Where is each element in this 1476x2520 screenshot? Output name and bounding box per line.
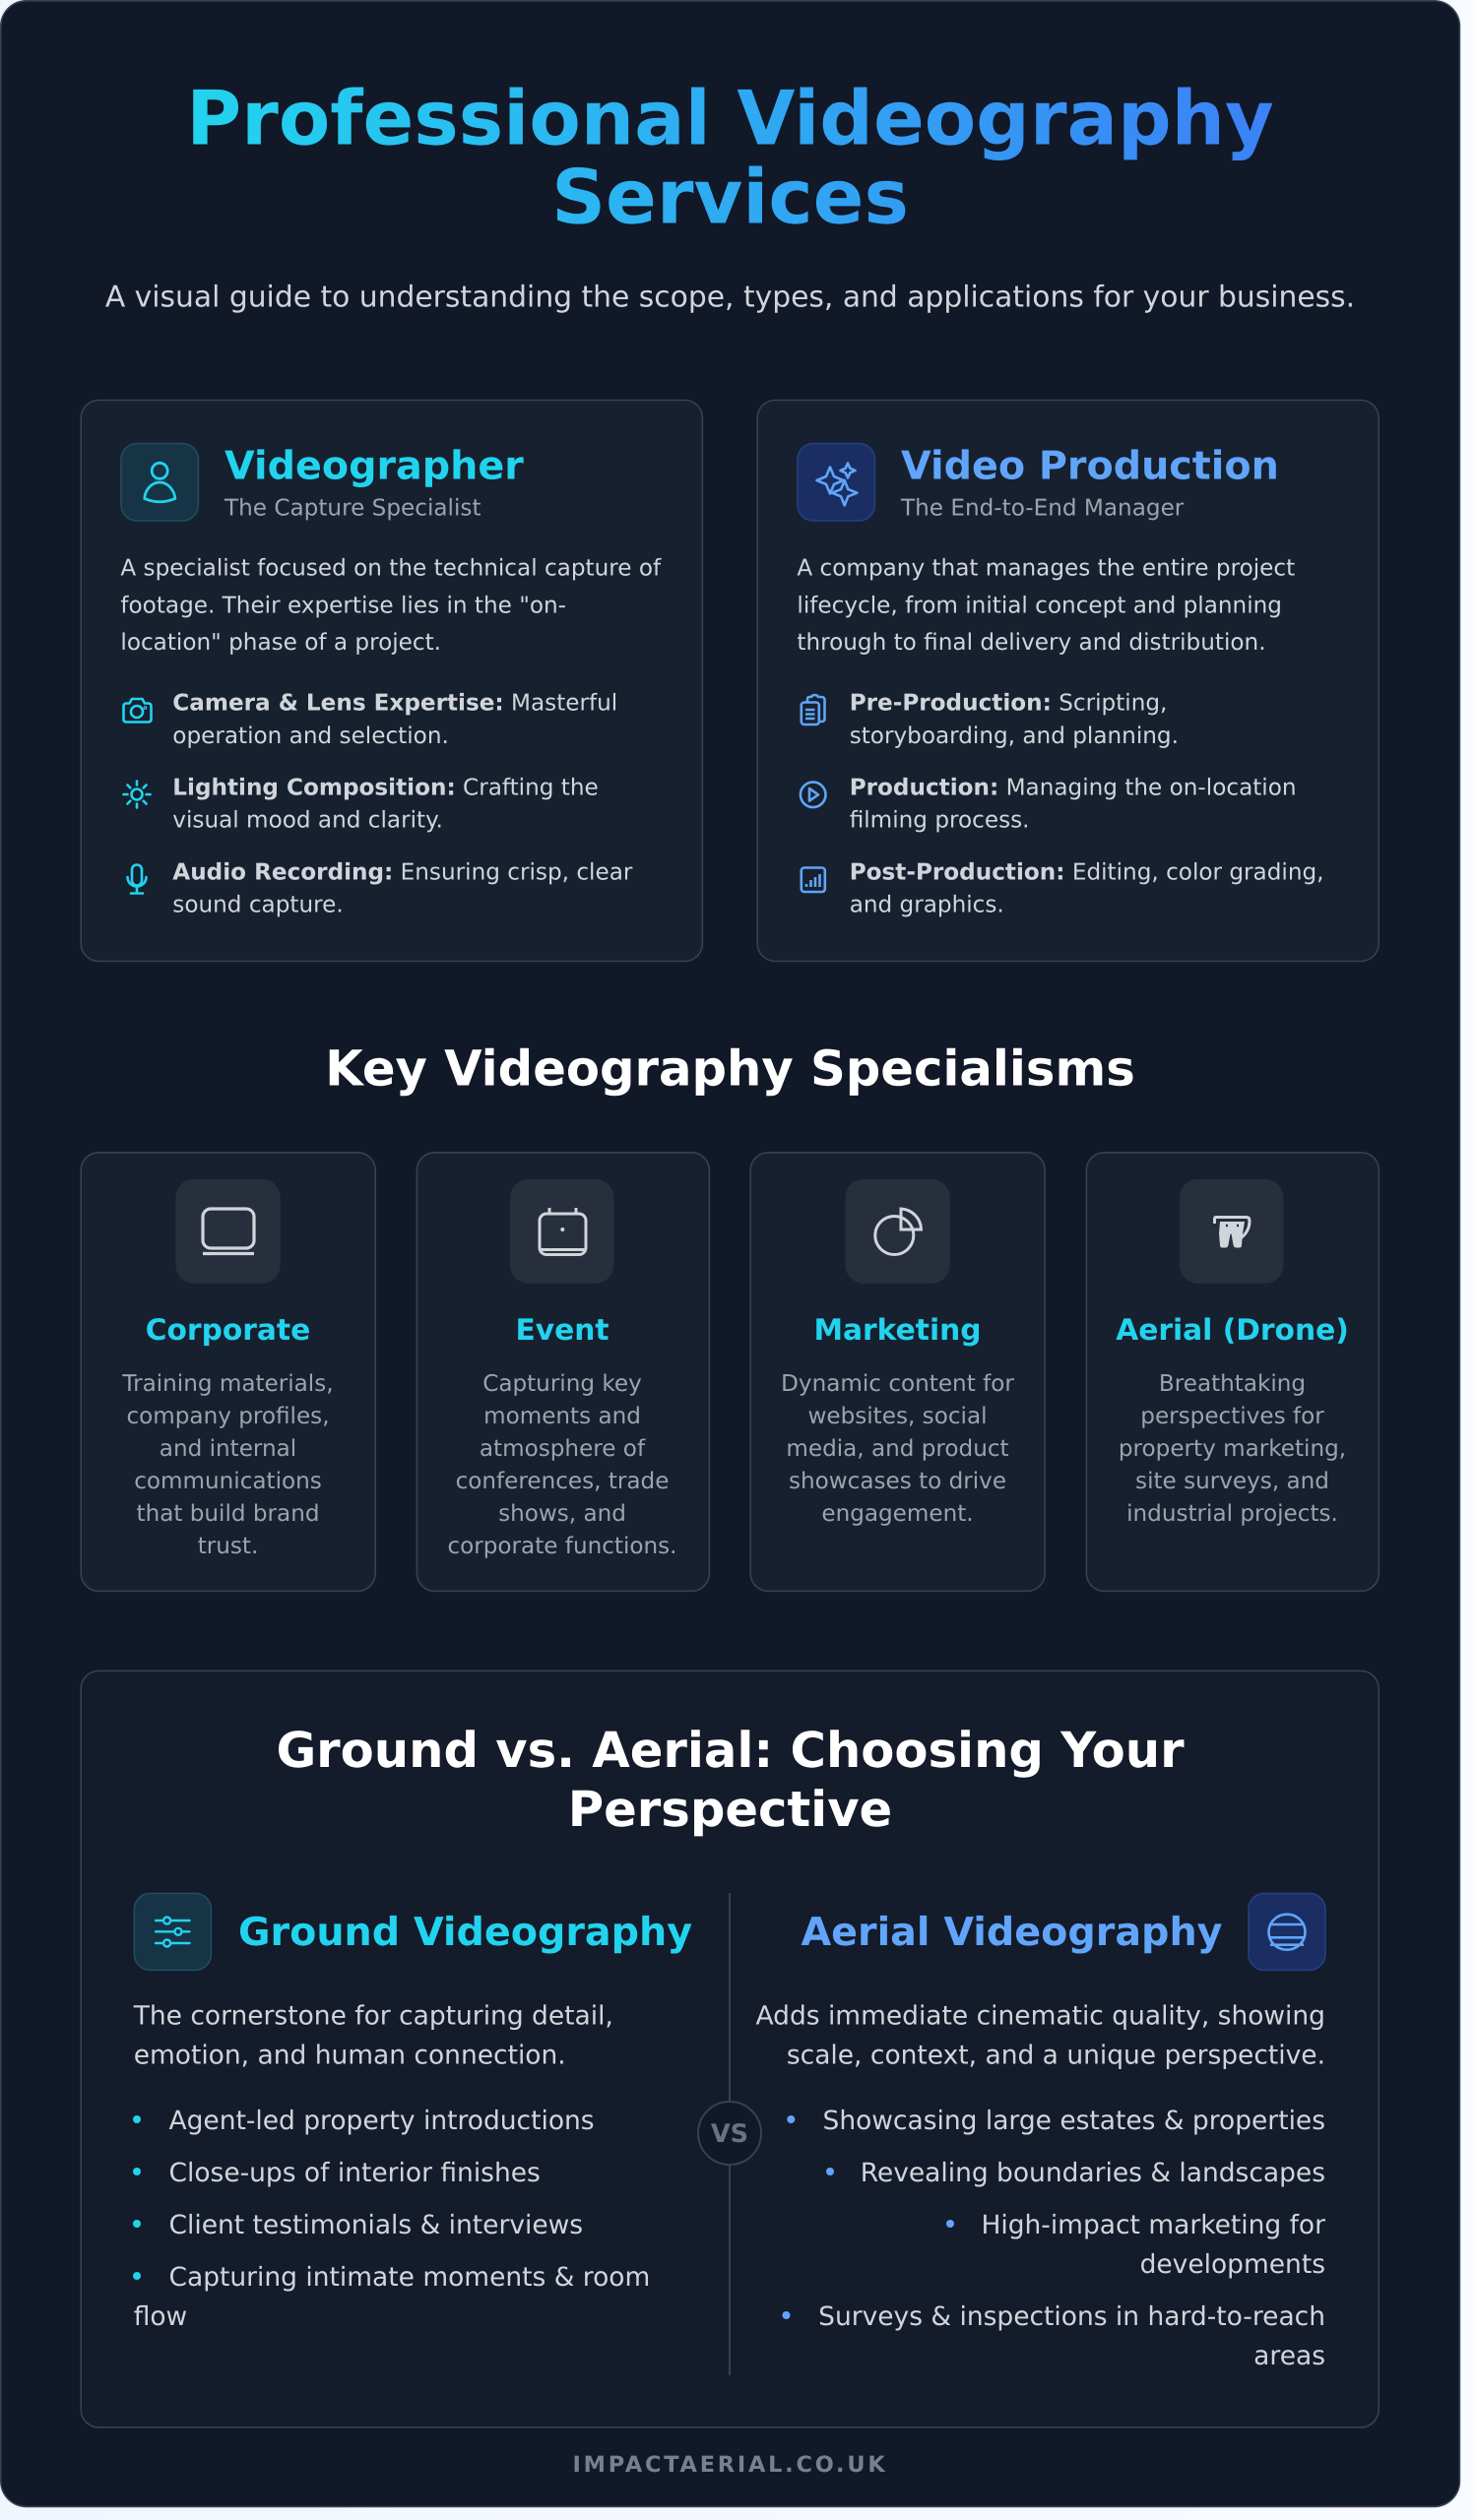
column: aerial videography — [756, 1893, 1325, 2371]
bullet list: ground uses — [133, 2106, 650, 2332]
divider with vs badge: VS — [711, 2119, 748, 2149]
description: emotion, and human connection. — [134, 2041, 566, 2071]
heading: video production: Video Production — [901, 444, 1279, 489]
list item: pre-production: Pre-Production: Scripting, — [850, 691, 1167, 717]
description: location" phase of a project. — [120, 630, 441, 656]
heading: comparison: Perspective — [568, 1781, 892, 1838]
description: Breathtaking — [1159, 1371, 1306, 1397]
description: websites, social — [807, 1404, 988, 1429]
description: shows, and — [498, 1501, 626, 1527]
list item: production: Production: Managing the on-location — [850, 776, 1297, 801]
description — [797, 555, 1295, 656]
heading: event: Event — [515, 1313, 610, 1348]
bullet list: ground uses: Close-ups of interior finishes — [169, 2158, 541, 2188]
description: Capturing key — [482, 1371, 642, 1397]
bullet list: aerial uses: areas — [1253, 2341, 1325, 2371]
heading: specialisms: Key Videography Specialisms — [325, 1040, 1135, 1097]
list item: lighting — [172, 776, 599, 834]
description — [121, 1371, 334, 1559]
column: ground videography — [133, 1893, 692, 2332]
description: A company that manages the entire project — [797, 555, 1295, 581]
icon: pie chart — [845, 1179, 950, 1284]
description: footage. Their expertise lies in the "on- — [120, 593, 566, 618]
subtitle: A visual guide to understanding the scope, types, and applications for your business. — [105, 280, 1355, 315]
list item: post-production: and graphics. — [850, 893, 1004, 918]
list item: post-production: Post-Production: Editing, color grading, — [850, 859, 1324, 885]
description: A specialist focused on the technical capture of — [120, 555, 662, 581]
description: site surveys, and — [1135, 1469, 1329, 1494]
icon: sun — [124, 782, 150, 807]
list item: audio: Audio Recording: Ensuring crisp, clear — [172, 859, 633, 885]
description: conferences, trade — [456, 1469, 669, 1494]
icon: sliders — [134, 1893, 211, 1970]
list item: camera and lens — [172, 691, 617, 749]
icon: chart — [802, 868, 825, 892]
heading: aerial videography: Aerial Videography — [801, 1910, 1223, 1955]
description — [781, 1371, 1014, 1527]
panel: aerial drone — [1086, 1153, 1379, 1591]
description: corporate functions. — [447, 1534, 677, 1559]
description: company profiles, — [126, 1404, 330, 1429]
description: property marketing, — [1119, 1436, 1346, 1462]
list item: production: filming process. — [850, 808, 1030, 834]
icon: sparkles — [798, 444, 874, 521]
icon: person — [121, 444, 198, 521]
description: showcases to drive — [789, 1469, 1006, 1494]
tagline: The Capture Specialist — [224, 495, 481, 521]
icon: globe — [1249, 1893, 1325, 1970]
heading: comparison — [276, 1722, 1185, 1838]
description: through to final delivery and distribution. — [797, 630, 1266, 656]
title: Professional Videography — [186, 76, 1274, 163]
description: moments and — [483, 1404, 641, 1429]
heading: aerial drone: Aerial (Drone) — [1116, 1313, 1349, 1348]
list item: camera and lens: Camera & Lens Expertise: Masterful — [172, 691, 617, 717]
heading: marketing: Marketing — [813, 1313, 982, 1348]
tagline: The End-to-End Manager — [900, 495, 1185, 521]
description: industrial projects. — [1126, 1501, 1338, 1527]
description: communications — [134, 1469, 322, 1494]
list item: lighting: Lighting Composition: Crafting the — [172, 776, 599, 801]
bullet list: aerial uses: High-impact marketing for — [981, 2210, 1325, 2240]
description: atmosphere of — [480, 1436, 646, 1462]
panel: corporate — [81, 1153, 375, 1591]
list item: audio — [172, 859, 633, 918]
description — [447, 1371, 677, 1559]
bullet list: aerial uses: Revealing boundaries & landscapes — [861, 2158, 1325, 2188]
panel: marketing — [750, 1153, 1045, 1591]
description: that build brand — [137, 1501, 319, 1527]
list item: audio: sound capture. — [172, 893, 344, 918]
description: The cornerstone for capturing detail, — [133, 2001, 613, 2032]
icon: play — [801, 782, 825, 807]
description: Training materials, — [121, 1371, 334, 1397]
footer: IMPACTAERIAL.CO.UK — [573, 2452, 887, 2478]
description: and internal — [160, 1436, 296, 1462]
icon: drone — [1180, 1179, 1283, 1284]
description — [1119, 1371, 1346, 1527]
description: media, and product — [786, 1436, 1009, 1462]
icon: microphone — [128, 864, 146, 894]
panel: ground vs aerial — [81, 1670, 1379, 2427]
bullet list: ground uses: flow — [134, 2301, 187, 2332]
title: Services — [551, 155, 909, 242]
bullet list: aerial uses: developments — [1140, 2249, 1325, 2280]
list item: post-production — [850, 859, 1324, 918]
bullet list: aerial uses — [782, 2106, 1325, 2371]
title — [186, 76, 1274, 242]
panel: videographer — [81, 400, 702, 961]
icon: camera — [124, 699, 152, 723]
list item: pre-production: storyboarding, and planning. — [850, 724, 1179, 749]
list item: pre-production — [850, 691, 1179, 749]
description — [133, 2001, 613, 2071]
heading: comparison: Ground vs. Aerial: Choosing Your — [276, 1722, 1185, 1779]
icon: laptop — [175, 1179, 281, 1284]
list item: lighting: visual mood and clarity. — [172, 808, 443, 834]
icon: calendar — [510, 1179, 613, 1284]
list item: camera and lens: operation and selection. — [172, 724, 449, 749]
bullet list: ground uses: Client testimonials & interviews — [169, 2210, 583, 2240]
panel: video production — [757, 400, 1379, 961]
description: Adds immediate cinematic quality, showing — [756, 2001, 1325, 2032]
bullet list: aerial uses: Showcasing large estates & properties — [823, 2106, 1325, 2136]
bullet list: aerial uses: Surveys & inspections in hard-to-reach — [818, 2301, 1325, 2332]
list item: production — [850, 776, 1297, 834]
bullet list: ground uses: Capturing intimate moments & room — [169, 2262, 650, 2293]
heading: ground videography: Ground Videography — [238, 1910, 692, 1955]
description: engagement. — [821, 1501, 974, 1527]
panel: event — [417, 1153, 709, 1591]
bullet list: ground uses: Agent-led property introductions — [169, 2106, 595, 2136]
icon: clipboard — [802, 695, 825, 724]
description: trust. — [198, 1534, 258, 1559]
heading: corporate: Corporate — [146, 1313, 310, 1348]
description — [756, 2001, 1325, 2071]
description: lifecycle, from initial concept and planning — [797, 593, 1282, 618]
description — [120, 555, 662, 656]
heading: videographer: Videographer — [225, 444, 524, 489]
description: Dynamic content for — [781, 1371, 1014, 1397]
description: perspectives for — [1140, 1404, 1324, 1429]
description: scale, context, and a unique perspective. — [787, 2041, 1325, 2071]
divider with vs badge — [698, 1893, 761, 2375]
